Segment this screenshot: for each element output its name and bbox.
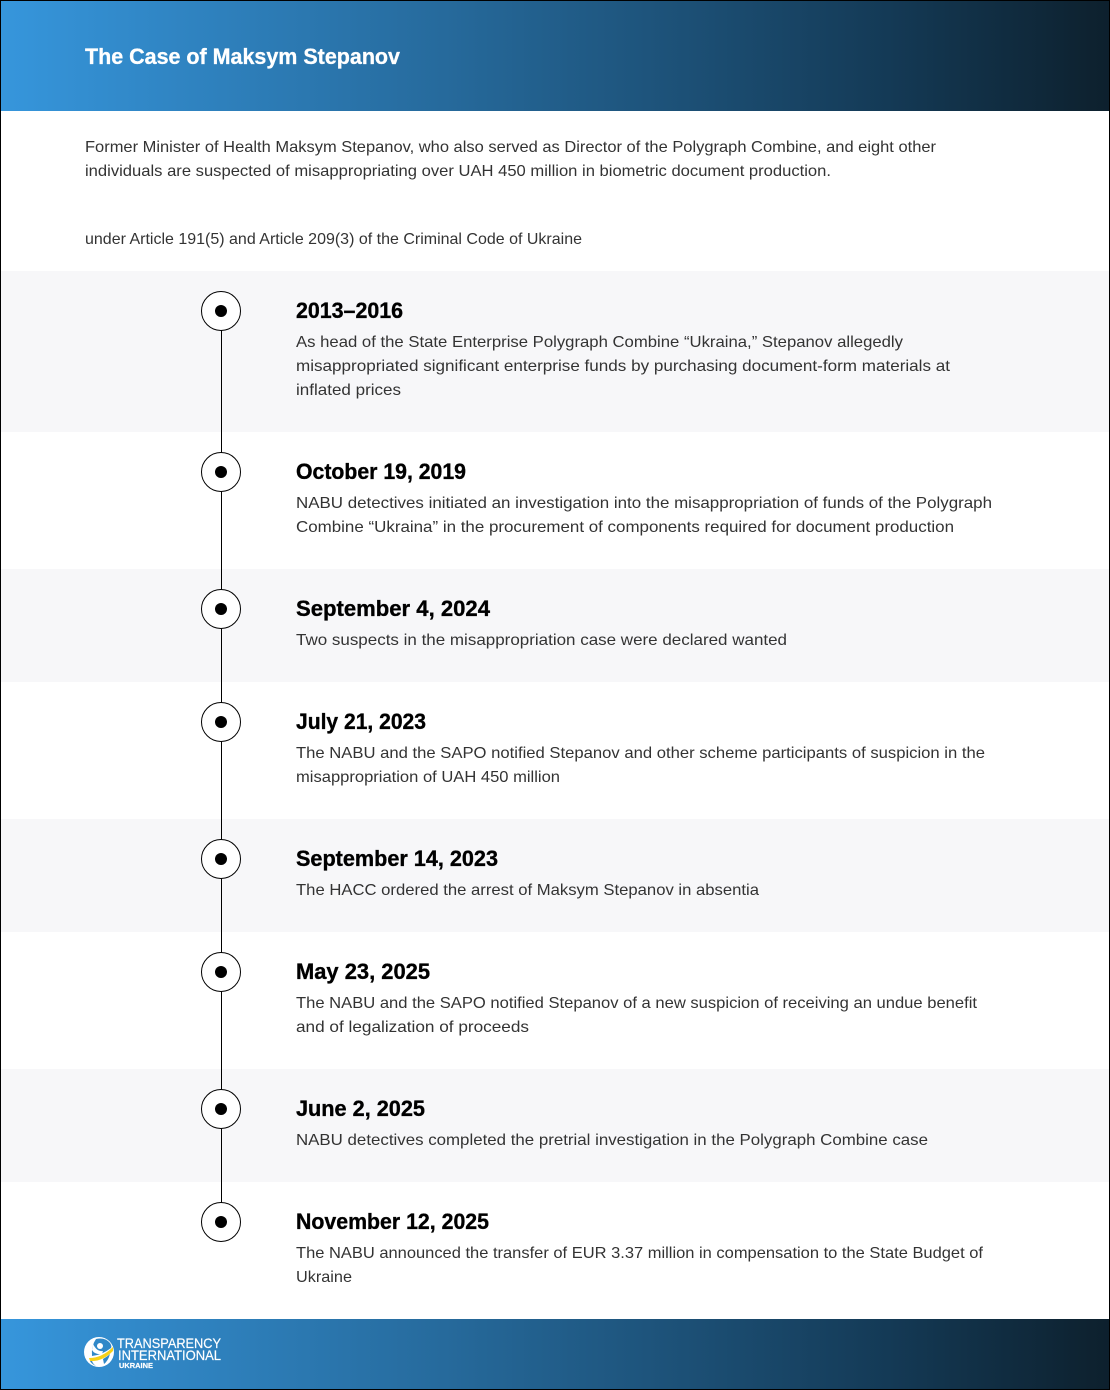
event: July 21, 2023: misappropriation of UAH 450 million (296, 769, 560, 786)
event: October 19, 2019: Combine “Ukraina” in the procurement of components required for document production (296, 519, 954, 536)
event: September 4, 2024 (202, 590, 787, 649)
intro text: individuals are suspected of misappropriating over UAH 450 million in biometric document production. (85, 163, 831, 180)
row backgrounds (1, 271, 1109, 1182)
event: November 12, 2025: The NABU announced the transfer of EUR 3.37 million in compensation to the State Budget of (296, 1245, 984, 1262)
event: September 14, 2023: The HACC ordered the arrest of Maksym Stepanov in absentia (296, 882, 759, 899)
event: June 2, 2025: June 2, 2025 (296, 1096, 425, 1121)
logo wordmark (117, 1335, 222, 1370)
icon: Transparency International logo (84, 1337, 114, 1367)
event: 2013–2016 (202, 292, 951, 399)
intro text: Former Minister of Health Maksym Stepanov, who also served as Director of the Polygraph Combine, and eight other (85, 139, 937, 156)
event: July 21, 2023: July 21, 2023 (296, 709, 426, 734)
footer banner (1, 1319, 1109, 1389)
event: July 21, 2023: The NABU and the SAPO notified Stepanov and other scheme participants of suspicion in the (296, 745, 985, 762)
event: September 4, 2024: Two suspects in the misappropriation case were declared wanted (296, 632, 787, 649)
event: September 4, 2024: September 4, 2024 (296, 596, 491, 621)
event: September 14, 2023 (202, 840, 759, 899)
event: May 23, 2025: The NABU and the SAPO notified Stepanov of a new suspicion of receiving an undue benefit (296, 995, 978, 1012)
logo wordmark: TRANSPARENCY (117, 1335, 222, 1351)
intro text (85, 139, 937, 180)
event: November 12, 2025: November 12, 2025 (296, 1209, 489, 1234)
header banner (1, 1, 1109, 111)
event: May 23, 2025 (202, 952, 978, 1036)
event: October 19, 2019: NABU detectives initiated an investigation into the misappropriation of funds of the Polygraph (296, 495, 992, 512)
event: September 14, 2023: September 14, 2023 (296, 846, 498, 871)
event: November 12, 2025 (202, 1202, 984, 1286)
event: 2013–2016: inflated prices (296, 382, 401, 399)
event: 2013–2016: 2013–2016 (296, 298, 403, 323)
event: May 23, 2025: May 23, 2025 (296, 959, 430, 984)
event: 2013–2016: As head of the State Enterprise Polygraph Combine “Ukraina,” Stepanov allegedly (296, 334, 903, 351)
legal basis text: under Article 191(5) and Article 209(3) of the Criminal Code of Ukraine (85, 231, 582, 248)
timeline line (220, 311, 222, 1222)
event: June 2, 2025: NABU detectives completed the pretrial investigation in the Polygraph Combine case (296, 1132, 928, 1149)
event: May 23, 2025: and of legalization of proceeds (296, 1019, 529, 1036)
event: July 21, 2023 (202, 702, 985, 786)
event: October 19, 2019 (202, 452, 992, 536)
title: The Case of Maksym Stepanov (85, 44, 401, 69)
event: June 2, 2025 (202, 1090, 928, 1149)
logo wordmark: UKRAINE (119, 1363, 153, 1370)
event: 2013–2016: misappropriated significant enterprise funds by purchasing document-form materials at (296, 358, 951, 375)
event: November 12, 2025: Ukraine (296, 1269, 352, 1286)
event: October 19, 2019: October 19, 2019 (296, 459, 466, 484)
logo wordmark: INTERNATIONAL (118, 1347, 221, 1363)
